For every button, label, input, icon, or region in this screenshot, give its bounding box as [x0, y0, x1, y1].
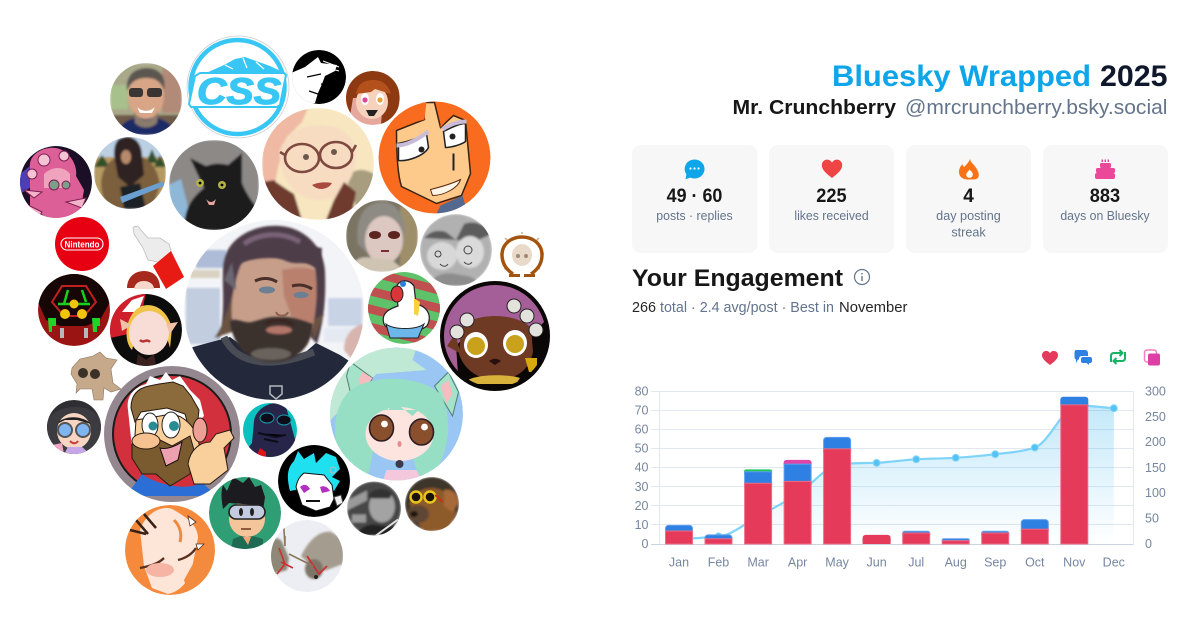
icon: legend repost	[1111, 350, 1125, 364]
avatar: blond character with red hat	[110, 292, 182, 366]
left axis labels: 10	[635, 518, 649, 532]
right axis labels: 0	[1145, 537, 1152, 551]
bar: Apr	[784, 460, 812, 544]
heading: Bluesky Wrapped 2025: Bluesky Wrapped	[832, 60, 1091, 93]
icon: legend replies	[1074, 350, 1092, 365]
text: engagement summary: total · 2.4 avg/post · Best in	[660, 300, 834, 316]
left axis labels: 40	[635, 460, 649, 474]
right axis labels: 200	[1145, 435, 1166, 449]
avatar: smiling man with glasses	[110, 63, 182, 135]
panel: days on Bluesky card	[1043, 145, 1168, 253]
avatar: main profile photo of bearded man	[182, 220, 366, 402]
text: display name and handle: Mr. Crunchberry	[732, 96, 897, 119]
avatar: woman with round glasses	[262, 108, 374, 220]
avatar: cartoon bearded man giving thumbs up	[104, 366, 240, 502]
avatar: orange-haired anime girl	[125, 505, 215, 595]
panel: streak card: streak	[951, 226, 986, 240]
bar: Mar	[744, 469, 772, 544]
right axis labels: 150	[1145, 461, 1166, 475]
panel: likes card	[769, 145, 894, 253]
avatar: fluffy tan creature	[71, 352, 121, 400]
grid lines	[651, 391, 1134, 544]
month labels: Jun	[867, 556, 887, 570]
avatar: black cat	[169, 140, 264, 231]
line: cumulative engagement	[679, 405, 1114, 539]
panel: likes card: likes received	[794, 209, 869, 223]
month labels: Mar	[747, 556, 769, 570]
panel: likes card: 225	[816, 186, 847, 207]
icon: heart	[822, 160, 842, 178]
avatar: chicken on striped background	[368, 270, 440, 349]
line markers	[715, 405, 1117, 540]
month labels: May	[825, 556, 850, 570]
text: display name and handle	[732, 96, 1168, 119]
bar: Nov	[1060, 397, 1088, 544]
icon: legend quote	[1144, 350, 1160, 366]
right axis labels: 250	[1145, 410, 1166, 424]
text: display name and handle: @mrcrunchberry.bsky.social	[905, 96, 1168, 119]
right axis labels	[1145, 384, 1166, 551]
panel: avatar cluster	[20, 36, 550, 600]
bar: Jan	[666, 525, 692, 544]
avatar: red-haired anime girl	[345, 71, 400, 125]
avatar: teal-haired anime cat girl	[326, 348, 463, 482]
right axis labels: 300	[1145, 384, 1166, 398]
bar: Jul	[903, 531, 930, 544]
month labels: Oct	[1025, 556, 1045, 570]
month labels: Aug	[945, 556, 967, 570]
icon: legend heart	[1042, 351, 1058, 365]
left axis labels: 30	[635, 480, 649, 494]
area: cumulative fill	[679, 405, 1114, 544]
month labels	[669, 556, 1125, 570]
text: engagement summary: November	[839, 300, 908, 316]
avatar: pixel metroid	[38, 274, 110, 346]
text: engagement summary: 266	[632, 300, 656, 316]
icon: chat bubble	[685, 159, 705, 179]
month labels: Jan	[669, 556, 689, 570]
bar: Feb	[705, 535, 732, 544]
month labels: Sep	[984, 556, 1006, 570]
month labels: Jul	[908, 556, 924, 570]
avatar: black and white sketch	[289, 50, 346, 106]
avatar: pencil sketch of two characters	[420, 214, 492, 286]
avatar: Nintendo logo	[55, 217, 109, 271]
avatar: cartoon guy with goggles	[209, 477, 281, 549]
panel: streak card	[906, 145, 1031, 253]
legend: engagement types	[1042, 350, 1160, 366]
bar: Sep	[982, 531, 1009, 544]
panel: days on Bluesky card: 883	[1090, 186, 1120, 207]
avatar: black helmet with sunglasses	[243, 403, 297, 457]
avatar: reindeer in snow	[271, 520, 343, 592]
avatar: girl with big blue glasses	[47, 400, 101, 454]
panel: days on Bluesky card: days on Bluesky	[1060, 209, 1150, 223]
panel: posts and replies card	[632, 145, 758, 253]
chart: monthly engagement	[635, 384, 1166, 570]
heading: Your Engagement: Your Engagement	[632, 265, 843, 292]
avatar: pink octopus pixel art	[20, 146, 92, 220]
icon: flame	[959, 159, 979, 180]
avatar: cyan pixel-haired character	[278, 445, 350, 517]
panel: posts and replies card: posts · replies	[656, 209, 733, 223]
panel: streak card: 4	[963, 186, 974, 207]
avatar: dog with yellow sunglasses	[405, 477, 459, 532]
avatar: black and white man portrait	[347, 482, 401, 536]
heading: Bluesky Wrapped 2025: 2025	[1100, 60, 1168, 93]
avatar: CSS mountain logo	[187, 36, 289, 138]
right axis labels: 100	[1145, 486, 1166, 500]
right axis labels: 50	[1145, 512, 1159, 526]
left axis labels: 20	[635, 499, 649, 513]
left axis labels	[635, 384, 649, 551]
bar: Aug	[942, 539, 969, 544]
month labels: Dec	[1103, 556, 1125, 570]
avatar: dwarf warrior with sword	[94, 137, 166, 209]
avatar: CSS mountain logo: CSS	[197, 71, 281, 112]
icon: info	[854, 270, 870, 284]
avatar: omega skull emblem	[500, 232, 544, 277]
left axis labels: 50	[635, 442, 649, 456]
avatar: brown chibi girl with purple hair	[440, 281, 550, 391]
stacked bars	[666, 397, 1088, 544]
avatar: pointing glove and red hat	[127, 226, 184, 289]
month labels: Nov	[1063, 556, 1086, 570]
avatar: pale antique portrait	[346, 200, 418, 272]
left axis labels: 0	[642, 537, 649, 551]
left axis labels: 70	[635, 404, 649, 418]
icon: birthday cake	[1095, 160, 1115, 179]
avatar: Nintendo logo: Nintendo	[64, 240, 100, 250]
bar: May	[824, 437, 851, 544]
avatar: orange-haired comic woman	[378, 102, 490, 218]
panel: streak card: day posting	[936, 209, 1001, 223]
bar: Jun	[863, 535, 891, 544]
month labels: Apr	[788, 556, 807, 570]
bar: Oct	[1021, 520, 1048, 544]
month labels: Feb	[708, 556, 729, 570]
left axis labels: 80	[635, 384, 649, 398]
text: engagement summary	[632, 300, 908, 316]
panel: posts and replies card: 49 · 60	[667, 186, 722, 207]
left axis labels: 60	[635, 422, 649, 436]
